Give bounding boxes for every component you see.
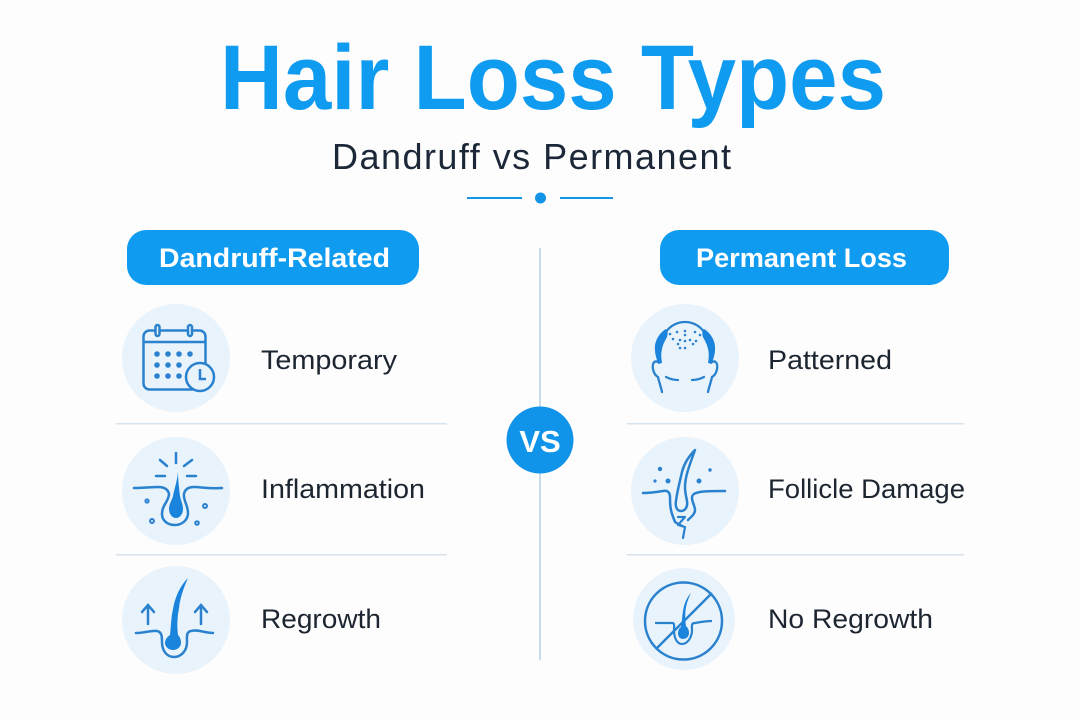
panel: permanent loss bbox=[631, 230, 965, 670]
icon: patterned baldness head bbox=[631, 304, 739, 412]
icon: regrowing follicle bbox=[122, 566, 230, 674]
panel: dandruff-related bbox=[122, 230, 425, 674]
icon: inflamed follicle bbox=[122, 437, 230, 545]
title divider bbox=[467, 192, 613, 204]
heading pill: Dandruff-Related: Dandruff-Related bbox=[159, 243, 390, 273]
label: Inflammation: Inflammation bbox=[261, 474, 425, 504]
heading pill: Permanent Loss bbox=[660, 230, 949, 285]
row dividers: left bbox=[116, 423, 447, 556]
label: No Regrowth: No Regrowth bbox=[768, 604, 933, 634]
VS badge: VS bbox=[519, 424, 561, 459]
icon: calendar with clock bbox=[122, 304, 230, 412]
icon: damaged follicle bbox=[631, 437, 739, 545]
icon: no regrowth bbox=[633, 568, 735, 670]
heading pill: Permanent Loss: Permanent Loss bbox=[696, 243, 907, 273]
row dividers: right bbox=[627, 423, 964, 556]
heading pill: Dandruff-Related bbox=[127, 230, 419, 285]
label: Regrowth: Regrowth bbox=[261, 604, 381, 634]
label: Patterned: Patterned bbox=[768, 345, 892, 375]
title: Hair Loss Types bbox=[220, 27, 886, 129]
label: Follicle Damage: Follicle Damage bbox=[768, 474, 965, 504]
label: Temporary: Temporary bbox=[261, 345, 398, 375]
subtitle: Dandruff vs Permanent bbox=[332, 136, 731, 177]
centre divider line bbox=[539, 248, 541, 660]
VS badge bbox=[506, 406, 574, 474]
crown outline and hairline bbox=[666, 322, 704, 332]
